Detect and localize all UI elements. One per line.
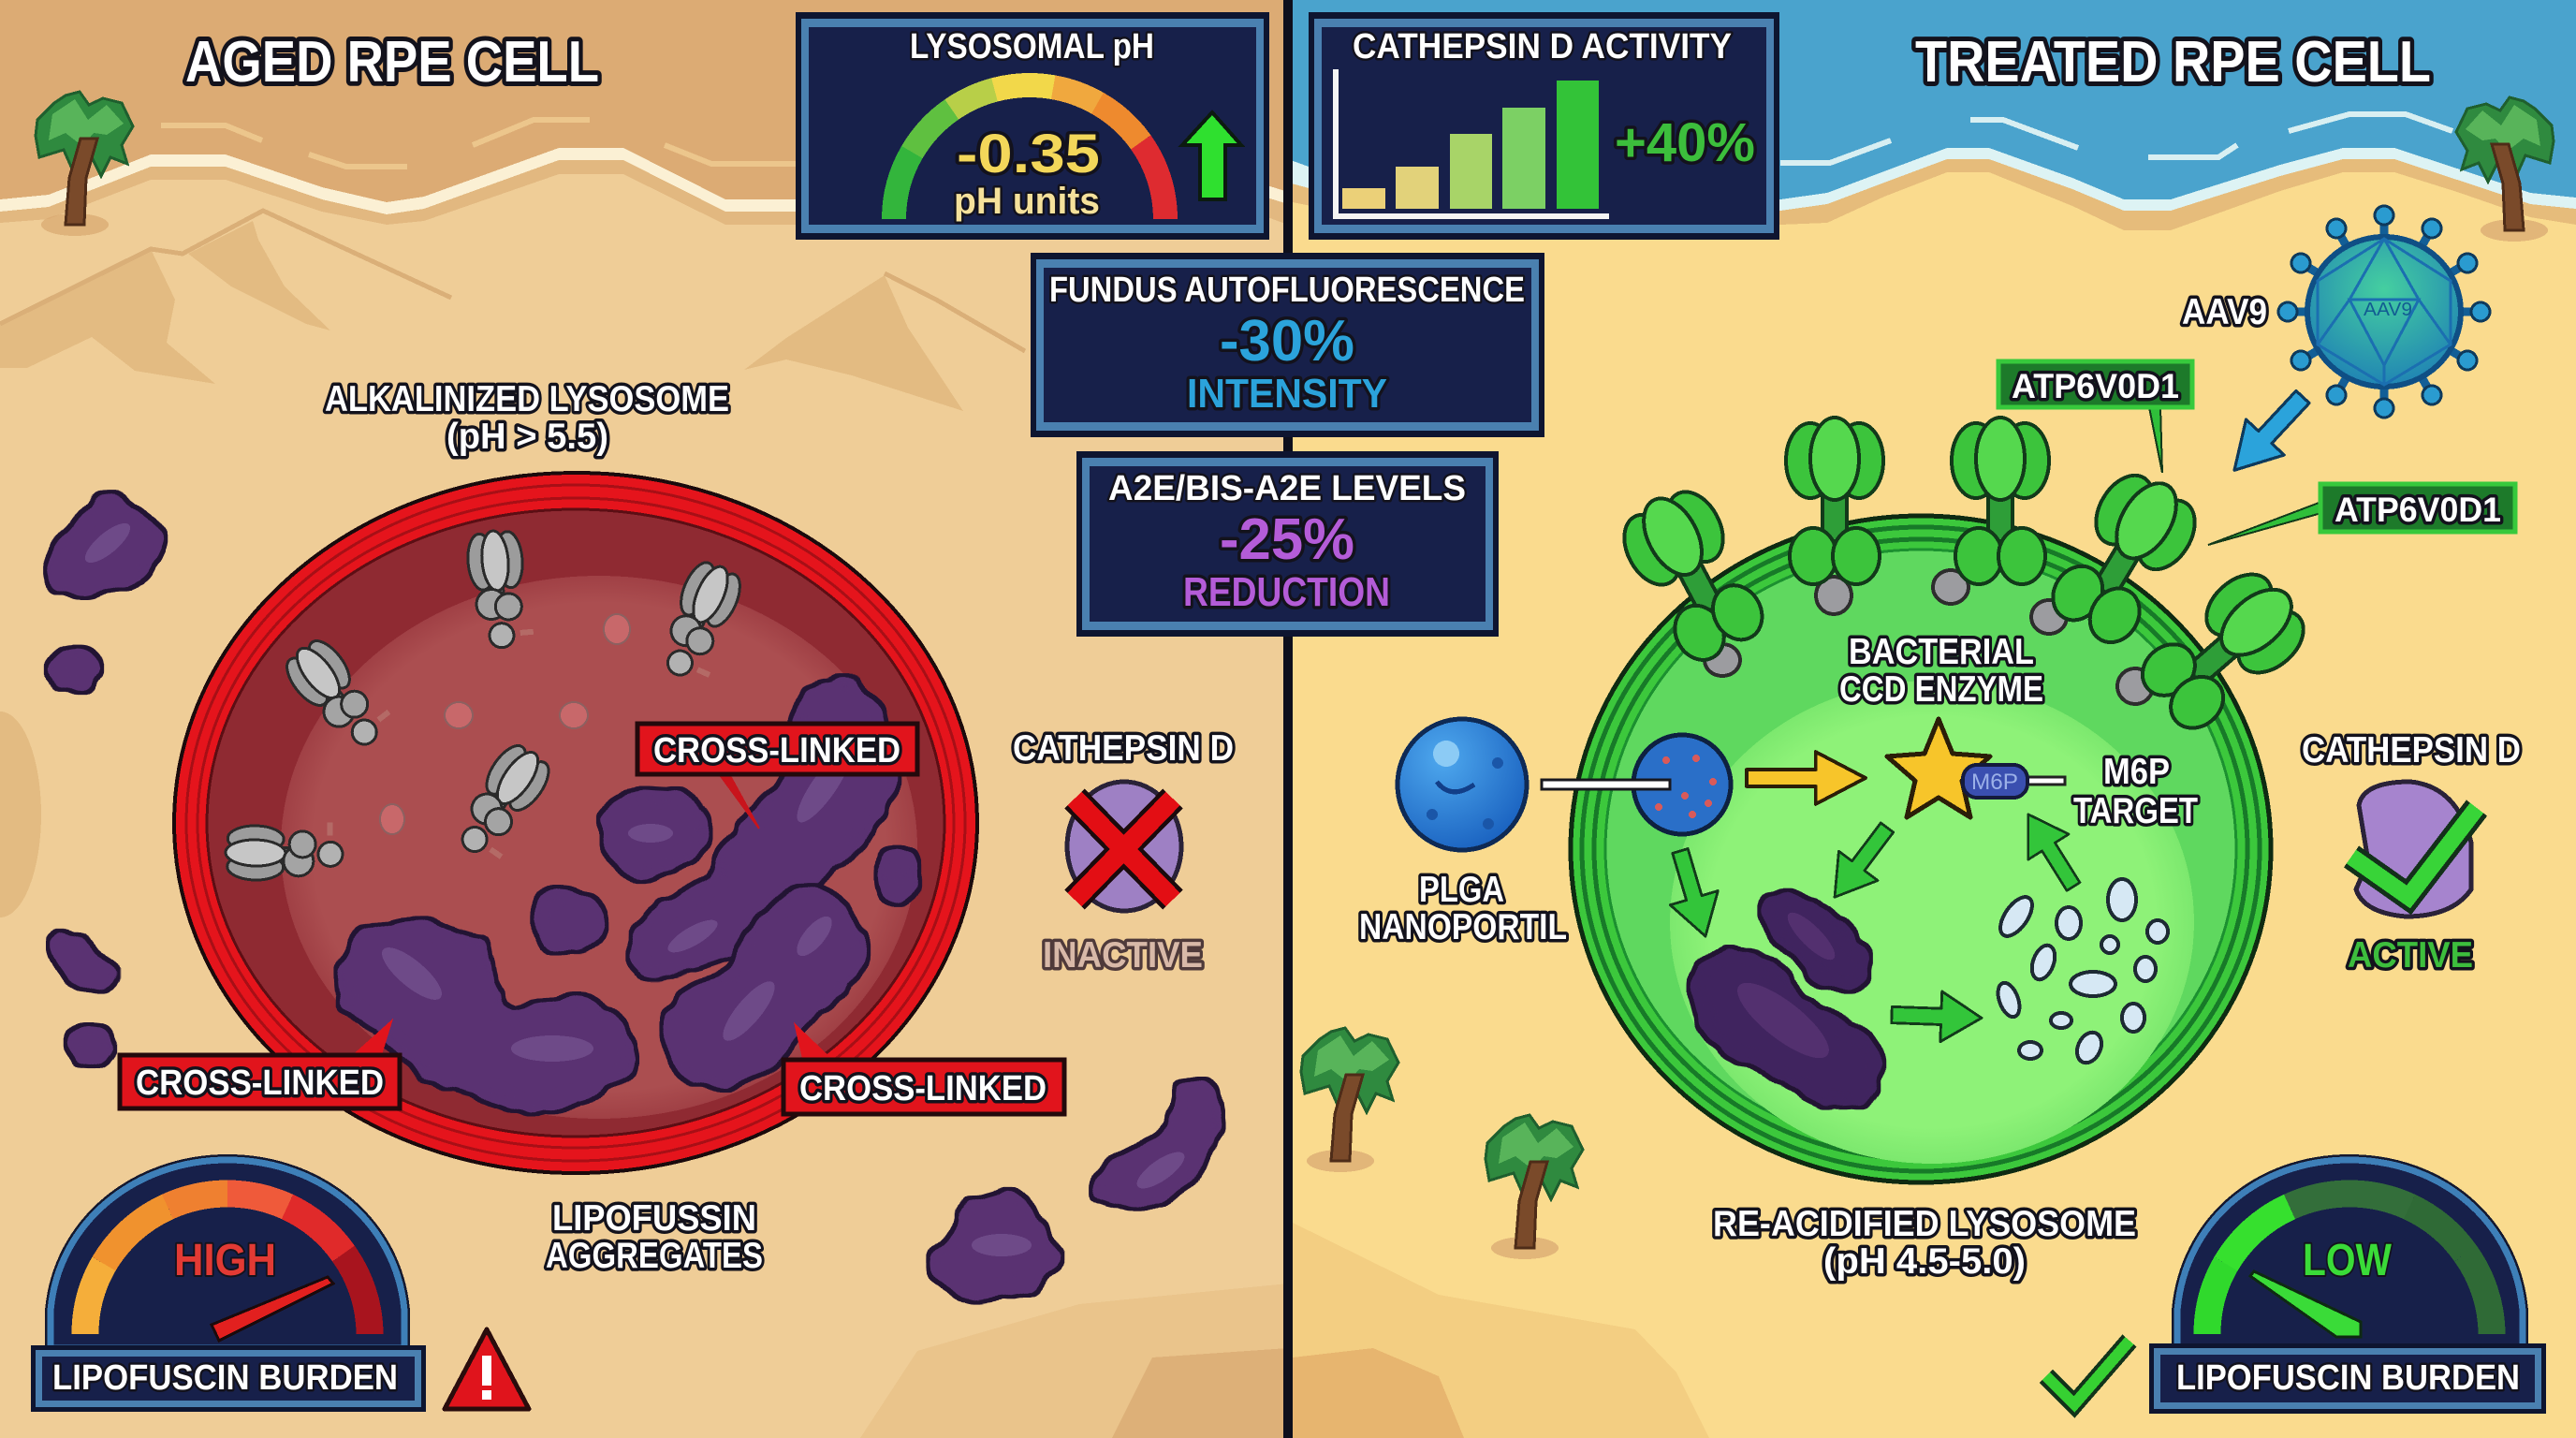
panel: lysosomal pH [796,12,1269,240]
+40 percent value: +40% [1615,112,1755,173]
intensity label: INTENSITY [1187,371,1387,417]
callout: cross-linked lower right [783,1022,1064,1114]
lipofuscin aggregates inside lysosome [337,680,917,1114]
lysosome membrane [1571,516,2271,1182]
callout: ATP6V0D1 upper [1998,361,2192,473]
label: cathepsin D (aged): CATHEPSIN D [1013,728,1234,769]
gauge reading: HIGH [174,1236,276,1285]
label: M6P target: TARGET [2073,791,2198,831]
callout: ATP6V0D1 right [2208,484,2515,545]
icon: AAV9 virus [2278,206,2490,418]
label: lipofuscin aggregates: LIPOFUSSIN [552,1198,756,1239]
icon: palm tree top right [2456,97,2554,242]
green V-ATPase 2 [1786,418,1883,584]
label: AAV9: AAV9 [2182,292,2267,332]
callout: cross-linked upper: CROSS-LINKED [653,731,900,770]
panel: cathepsin D activity [1309,12,1779,240]
panel: A2E levels [1076,451,1499,637]
icon: CCD enzyme star [1887,719,1990,817]
pH value: -0.35 [957,124,1100,184]
gauge: low lipofuscin burden [2149,1160,2546,1414]
small degraded enzyme dots [380,614,630,834]
panel title: A2E/BIS-A2E LEVELS [1108,469,1466,508]
label: alkalinized lysosome [325,379,729,457]
bar chart [1333,69,1609,219]
callout: cross-linked lower left: CROSS-LINKED [136,1064,384,1103]
label: lipofuscin aggregates [546,1198,763,1276]
callout: cross-linked upper [637,724,917,829]
grey inactive V-ATPase 1 [465,528,534,650]
grey ball anchors [1705,570,2153,704]
icon: M6P tag: M6P [1971,770,2018,795]
label: bacterial CCD enzyme: BACTERIAL [1849,632,2034,672]
lipofuscin particles outside the lysosome [45,487,1222,1300]
digested fragments [1994,879,2168,1066]
icon: nanoparticle inside lysosome [1633,735,1731,834]
callout: ATP6V0D1 upper: ATP6V0D1 [2012,367,2179,405]
icon: PLGA nanoparticle [1398,719,1527,850]
icon: green check mark [2046,1341,2130,1404]
icon: inactive cathepsin with red X [1067,782,1181,911]
label: M6P target [2073,752,2198,831]
gauge reading: LOW [2303,1236,2393,1285]
label: bacterial CCD enzyme [1839,632,2043,710]
panel title: CATHEPSIN D ACTIVITY [1353,27,1732,66]
gauge arc segments [2207,1194,2492,1334]
label: PLGA nanoportil: NANOPORTIL [1359,907,1567,947]
label: re-acidified lysosome: (pH 4.5-5.0) [1823,1241,2026,1282]
green V-ATPase 5 [2130,559,2320,741]
icon: M6P tag [1963,765,2065,798]
pH unit: pH units [954,181,1100,222]
gauge caption box [2149,1343,2546,1414]
icon: warning triangle [445,1329,529,1409]
green V-ATPase 3 [1952,418,2049,584]
label: alkalinized lysosome: ALKALINIZED LYSOSOME [325,379,729,419]
gauge: high lipofuscin burden [31,1160,426,1412]
centre divider [1283,0,1293,1438]
label: lipofuscin aggregates: AGGREGATES [546,1236,763,1276]
-25 percent value: -25% [1220,507,1354,572]
icon: palm tree lower beach 1 [1301,1028,1398,1172]
arrow: fragments to target [2008,801,2094,900]
label: bacterial CCD enzyme: CCD ENZYME [1839,669,2043,710]
panel: fundus autofluorescence [1031,253,1544,437]
callout: ATP6V0D1 right: ATP6V0D1 [2334,491,2501,529]
grey inactive V-ATPase 2 [651,556,752,687]
background: treated side beach [1288,0,2576,1438]
grey inactive V-ATPase 3 [278,630,397,758]
grey inactive V-ATPase 4 [446,738,561,868]
chart: pH arc gauge [894,85,1165,219]
label: re-acidified lysosome [1713,1204,2136,1282]
panel: alkalinized lysosome cell [120,473,1064,1173]
label: alkalinized lysosome: (pH > 5.5) [446,417,608,457]
gauge caption box: LIPOFUSCIN BURDEN [52,1358,398,1398]
grey inactive V-ATPase 5 [225,820,344,882]
gauge caption box [31,1345,426,1412]
lipofuscin being degraded [1690,887,1887,1107]
gauge needle [2250,1271,2361,1337]
green V-ATPase 1 [1610,477,1775,670]
panel title: LYSOSOMAL pH [910,27,1154,66]
label: re-acidified lysosome: RE-ACIDIFIED LYSOSOME [1713,1204,2136,1244]
icon: active cathepsin with green check [2351,782,2477,917]
icon: palm tree lower beach 2 [1486,1115,1583,1259]
label: active: ACTIVE [2348,935,2473,976]
heading: aged RPE cell: AGED RPE CELL [185,30,599,95]
label: PLGA nanoportil: PLGA [1419,870,1504,910]
arrow: AAV9 delivery [2216,379,2321,488]
arrow: nanoparticle to enzyme [1747,752,1866,804]
-30 percent value: -30% [1220,309,1354,374]
heading: treated RPE cell: TREATED RPE CELL [1915,30,2431,95]
callout: cross-linked lower right: CROSS-LINKED [799,1069,1046,1108]
icon: green up arrow [1182,112,1241,199]
gauge needle [212,1277,333,1341]
connector: nanoparticle entry [1542,780,1670,789]
label: M6P target: M6P [2103,752,2170,792]
callout: cross-linked lower left [120,1019,400,1108]
background: aged side desert [0,0,1288,1438]
arrow: nanoparticle to lipofuscin [1656,844,1729,944]
panel: re-acidified lysosome cell [1571,418,2320,1182]
label: cathepsin D (treated): CATHEPSIN D [2302,730,2521,770]
gauge caption box: LIPOFUSCIN BURDEN [2176,1358,2520,1398]
label: PLGA nanoportil [1359,870,1567,947]
reduction label: REDUCTION [1183,569,1390,615]
lysosome membrane [174,473,977,1173]
icon: AAV9 virus: AAV9 [2364,300,2412,320]
label: inactive: INACTIVE [1043,935,1203,976]
icon: palm tree top left [36,92,133,236]
green V-ATPase 4 [2040,461,2209,653]
gauge arc segments [85,1194,370,1334]
arrow: lipofuscin to fragments [1891,990,1983,1043]
panel title: FUNDUS AUTOFLUORESCENCE [1049,271,1525,310]
arrow: enzyme to lipofuscin [1815,813,1907,912]
